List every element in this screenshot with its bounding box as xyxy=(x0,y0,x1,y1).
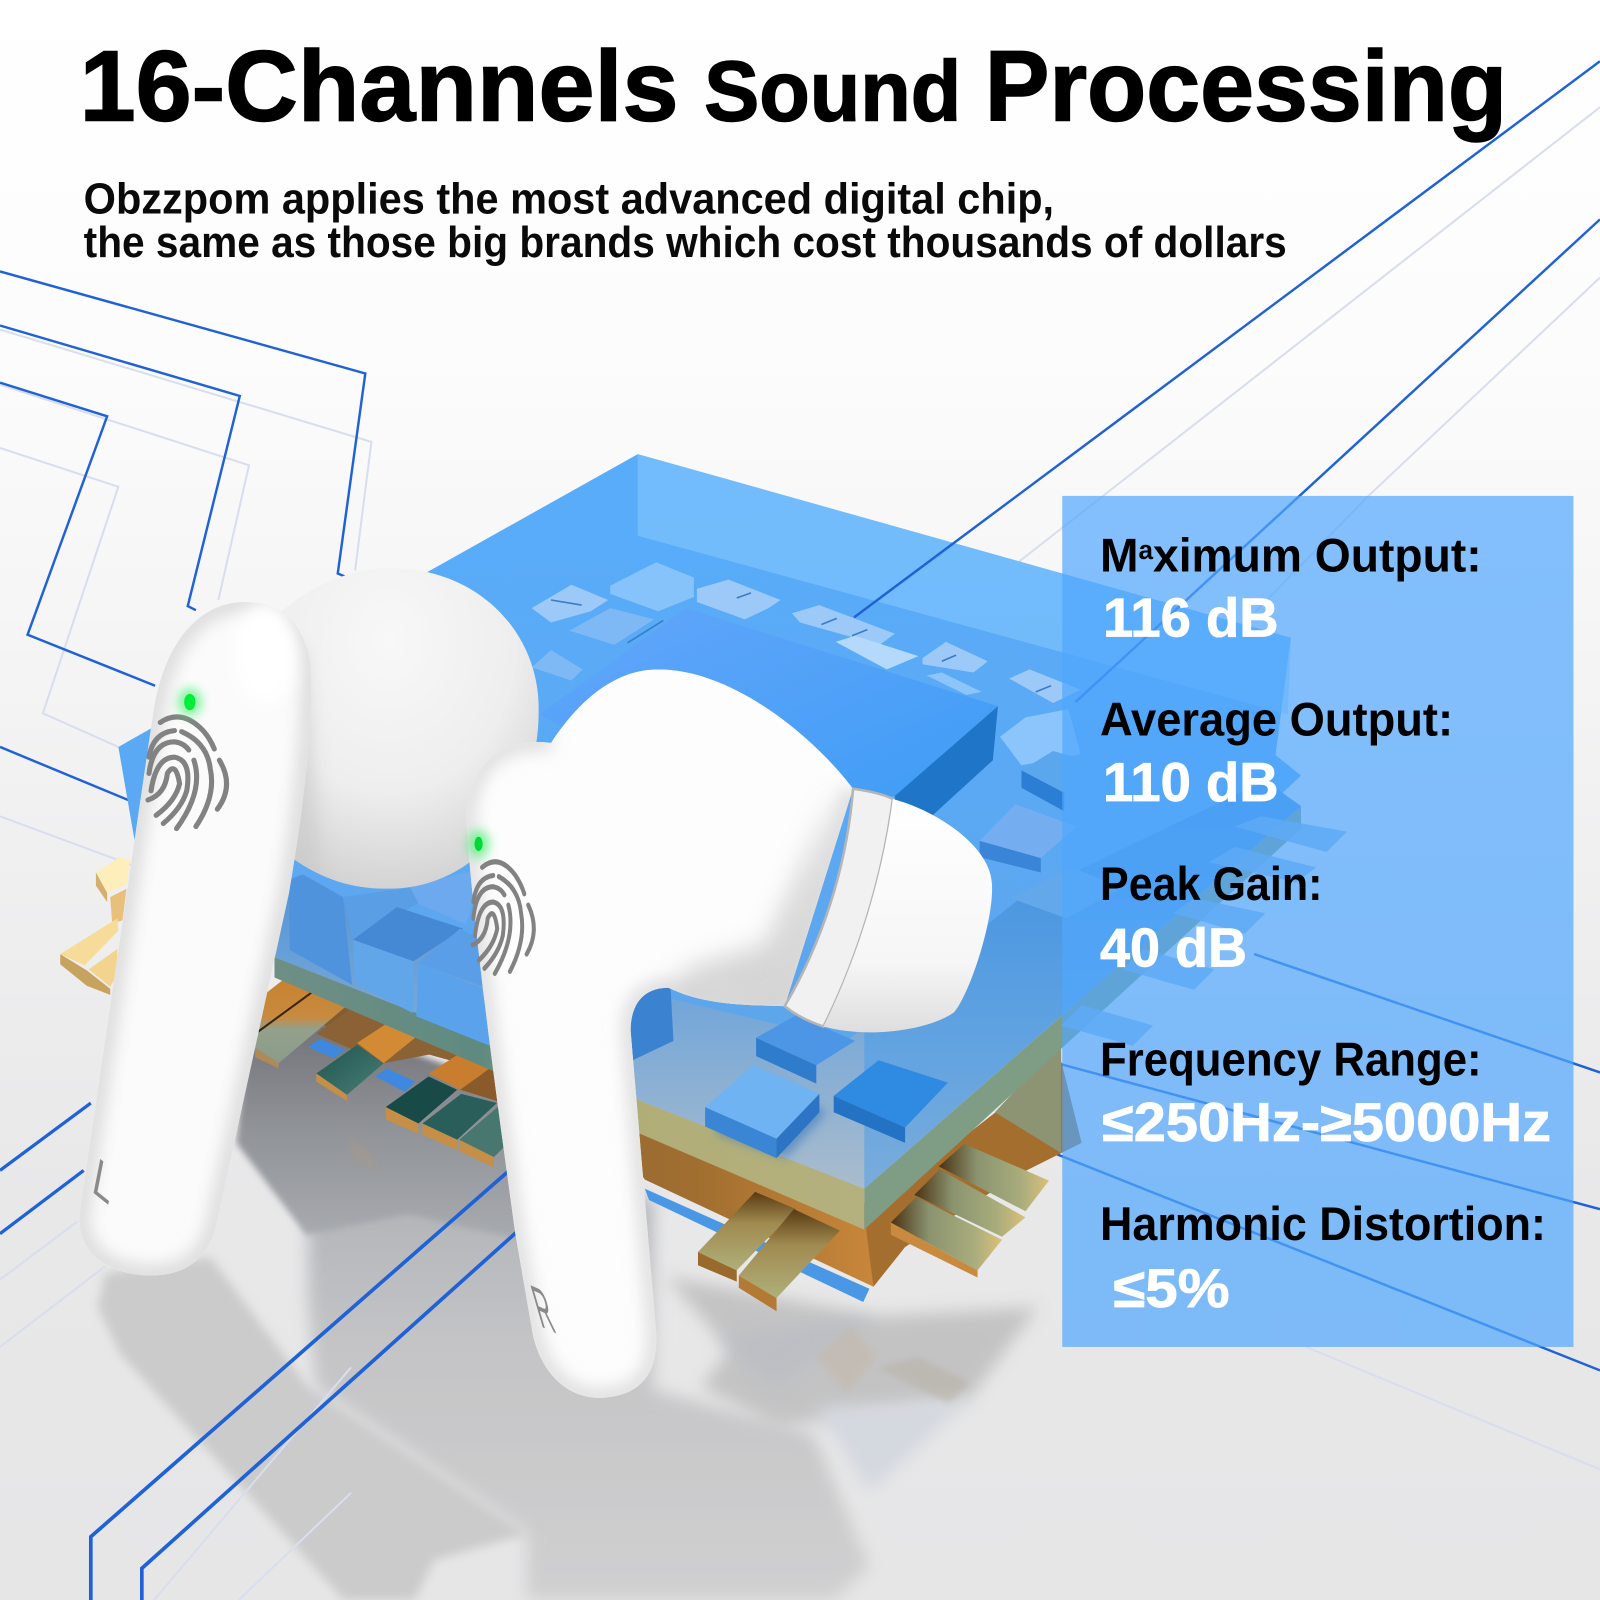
floor reflection xyxy=(98,1010,1038,1600)
spec: peak gain: 40 dB xyxy=(1100,916,1247,978)
left earbud stem xyxy=(90,602,308,1276)
lines seen through the chip xyxy=(854,61,1600,702)
subtitle xyxy=(84,174,1287,267)
right pins xyxy=(1061,816,1347,1046)
spec: frequency range: Frequency Range: xyxy=(1100,1034,1482,1086)
right letter: R xyxy=(525,1272,561,1348)
board top xyxy=(274,781,1301,1189)
blocks on board xyxy=(289,751,1122,1158)
left LED xyxy=(178,688,202,716)
spec panel xyxy=(1062,496,1573,1347)
ear tip collar xyxy=(785,789,893,1027)
spec: harmonic distortion: Harmonic Distortion: xyxy=(1100,1198,1546,1250)
spec: maximum output xyxy=(1100,529,1482,649)
title xyxy=(80,30,1507,142)
spec: frequency range xyxy=(1100,1034,1551,1153)
back row of tiles xyxy=(532,562,1081,765)
spec: average output: Average Output: xyxy=(1100,694,1453,746)
under-board body and pins xyxy=(255,964,1082,1311)
right fingerprint xyxy=(473,862,534,973)
left fingerprint xyxy=(148,717,227,829)
spec: average output xyxy=(1100,694,1453,813)
left gold pins xyxy=(60,857,130,995)
spec: average output: 110 dB xyxy=(1103,751,1279,813)
chip illustration xyxy=(60,61,1600,1311)
inner box xyxy=(540,608,998,847)
earbud: right xyxy=(449,653,992,1408)
title: 16-Channels xyxy=(80,30,679,142)
spec: harmonic distortion xyxy=(1100,1198,1546,1319)
title: Sound xyxy=(704,43,961,139)
panel background xyxy=(1062,496,1573,1347)
spec: maximum output: ximum Output: xyxy=(1153,529,1482,581)
spec: peak gain: Peak Gain: xyxy=(1100,858,1322,910)
spec: maximum output: M xyxy=(1100,529,1139,581)
board side xyxy=(274,806,1301,1230)
title: Processing xyxy=(985,30,1507,142)
spec: peak gain xyxy=(1100,858,1322,978)
right earbud body xyxy=(466,669,852,1398)
spec: maximum output: a xyxy=(1139,535,1153,565)
earbud: left xyxy=(61,551,561,1286)
right LED xyxy=(467,830,490,858)
spec: frequency range: ≤250Hz-≥5000Hz xyxy=(1102,1091,1551,1153)
left letter: L xyxy=(89,1146,118,1216)
spec: maximum output: 116 dB xyxy=(1103,587,1279,649)
spec: harmonic distortion: ≤5% xyxy=(1113,1257,1230,1319)
subtitle: Obzzpom applies the most advanced digital chip, xyxy=(84,174,1054,223)
left earbud head xyxy=(294,572,539,889)
subtitle: the same as those big brands which cost thousands of dollars xyxy=(84,218,1287,267)
translucent outer box xyxy=(118,454,1301,1189)
ear tip xyxy=(823,799,992,1032)
